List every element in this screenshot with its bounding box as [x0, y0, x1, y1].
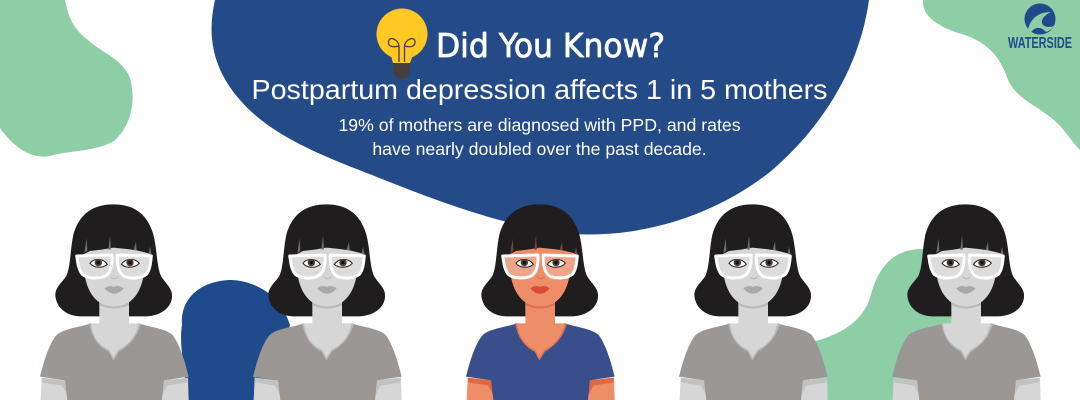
figure: mother 4 (gray): [679, 204, 828, 400]
icon: lightbulb: [376, 8, 428, 79]
supporting text: 19% of mothers are diagnosed with PPD, and rates: [338, 115, 741, 135]
background blob: bottom-left blue: [181, 280, 290, 400]
supporting text: have nearly doubled over the past decade.: [372, 139, 707, 159]
logo: Waterside: [1008, 4, 1072, 52]
figure: mother 5 (gray): [892, 204, 1041, 400]
headline statistic: Postpartum depression affects 1 in 5 mothers: [252, 74, 827, 105]
supporting text: [338, 115, 741, 159]
heading: Did You Know?: Did You Know?: [436, 26, 665, 65]
figure: mother 2 (gray): [253, 204, 402, 400]
background blob: top-right green: [923, 0, 1080, 150]
figure: mother 1 (gray): [40, 204, 189, 400]
figure: mother 3 (highlighted in colour): [466, 204, 615, 400]
background blob: top-left green: [0, 0, 133, 157]
background blob: bottom-right green: [812, 249, 1000, 400]
panel: blue speech blob: [212, 0, 869, 234]
